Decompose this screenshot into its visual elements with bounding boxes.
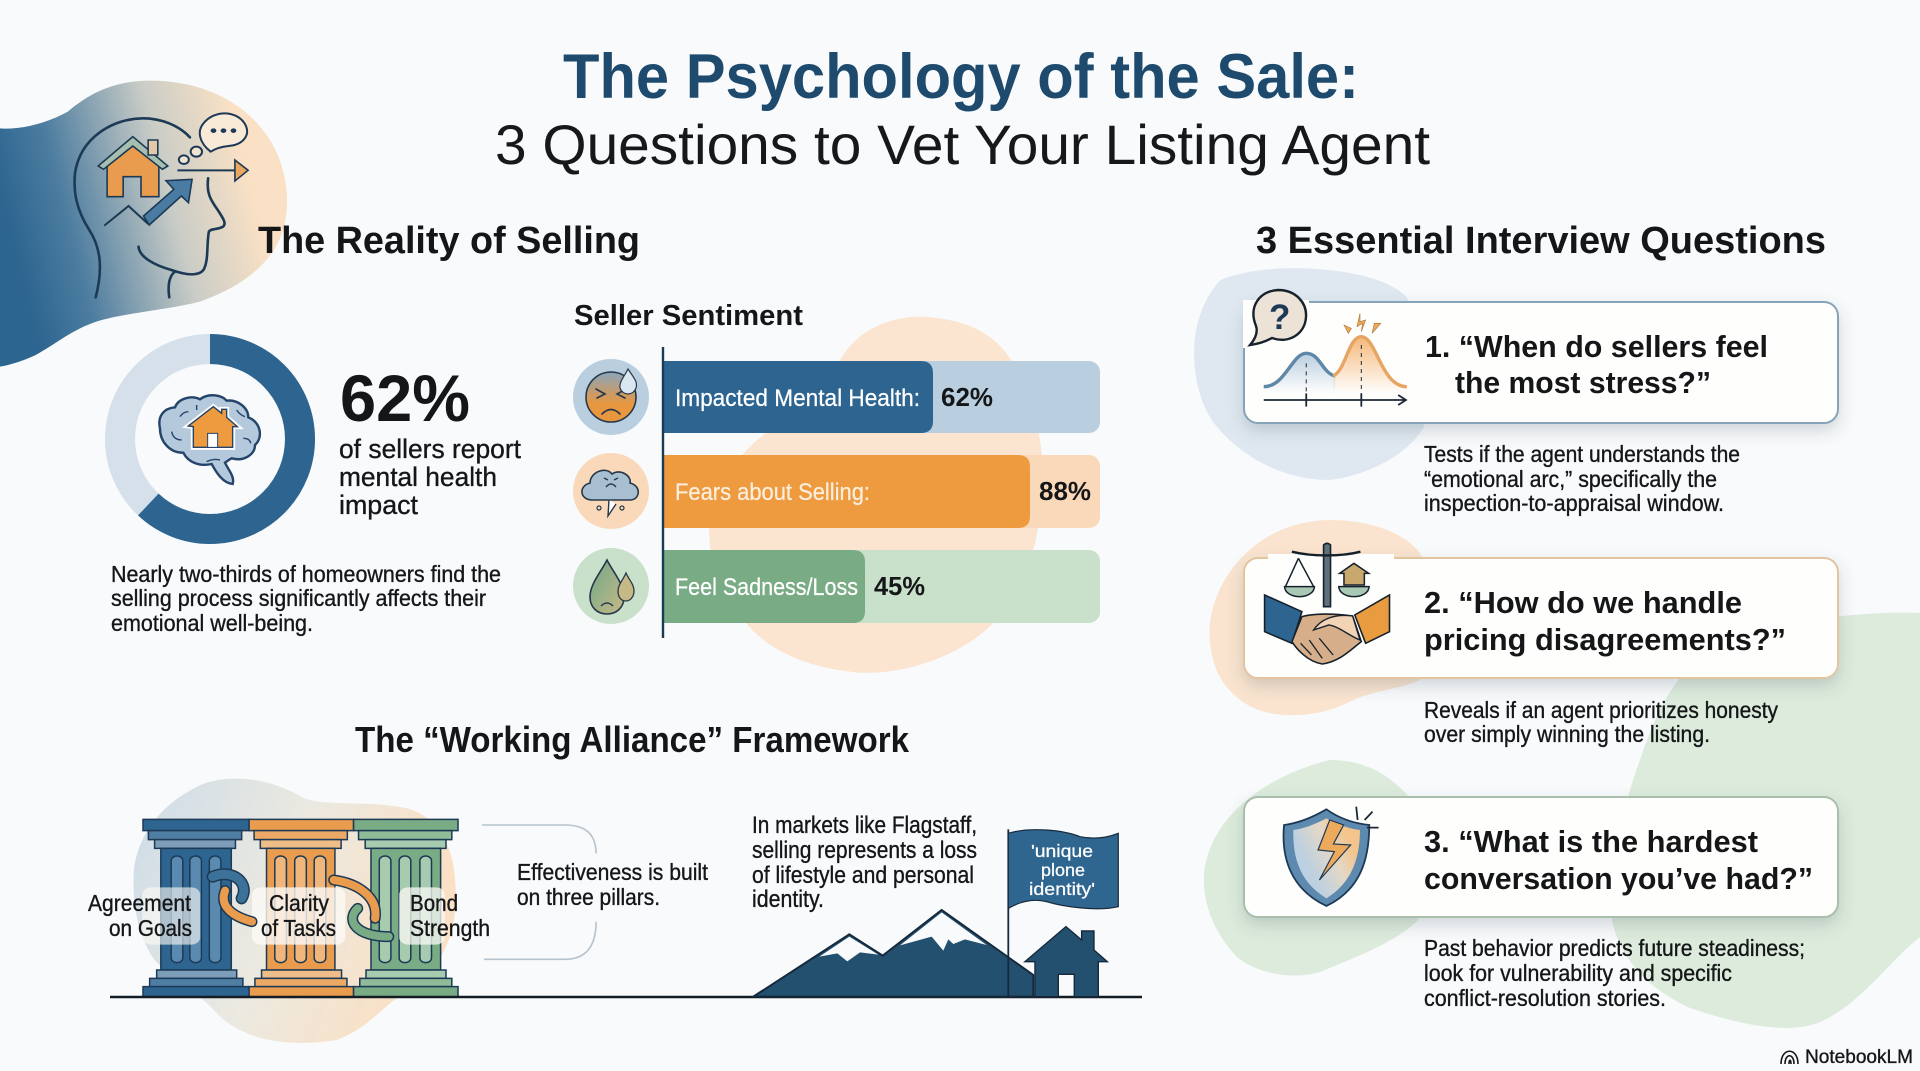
pillar labels: on Goals [109,915,192,941]
flag [1008,829,1118,997]
question card 3 [1204,760,1838,1011]
icon: question bubble: ? [1269,298,1290,337]
text: two-thirds description [111,561,501,636]
text: flagstaff note: identity. [752,886,824,913]
donut chart: 62% [120,349,300,529]
stat: 62% of sellers [339,361,521,520]
heading: interview questions: 3 Essential Interview Questions [1256,220,1826,262]
description [1424,697,1778,747]
background blob: large green right [1612,613,1920,1028]
description: “emotional arc,” specifically the [1424,466,1717,492]
icon: head with house and rising arrow on gradient blob [0,81,287,367]
flag text: identity' [1029,879,1095,899]
question text [1424,585,1786,657]
bar: impacted mental health: Impacted Mental Health: [675,385,920,412]
card [1244,558,1838,678]
label backgrounds [142,887,445,945]
pillar labels [88,890,490,941]
question text: 3. “What is the hardest [1424,824,1758,859]
question text: conversation you’ve had?” [1424,861,1813,896]
text: two-thirds description: Nearly two-thirds of homeowners find the [111,561,501,587]
description: conflict-resolution stories. [1424,985,1666,1011]
text: effectiveness note [517,859,709,910]
blob: blue [1194,268,1427,480]
blob: green [1204,760,1418,975]
bar: feel sadness/loss: Feel Sadness/Loss [675,574,858,601]
card [1244,302,1838,423]
icon: brain with house [159,395,260,484]
background blob: behind pillars [134,779,456,1043]
bracket around pillars note [482,825,596,959]
icon: question bubble [1250,290,1306,345]
icon: stressed face [573,359,649,435]
card [1244,797,1838,917]
bar: impacted mental health: 62% [941,382,993,412]
bar: feel sadness/loss [663,550,1100,623]
notebooklm watermark: NotebookLM [1805,1047,1913,1068]
bar chart: seller sentiment [663,347,1100,638]
question text: the most stress?” [1455,365,1711,400]
pillar: clarity of tasks [249,819,354,997]
pillar labels: Clarity [269,890,329,916]
stat: 62% of sellers: mental health [339,462,497,492]
title: 3 Questions to Vet Your Listing Agent [495,113,1430,176]
description: look for vulnerability and specific [1424,960,1732,986]
bar: fears about selling: Fears about Selling: [675,479,870,506]
question text [1425,329,1768,400]
text: flagstaff note: of lifestyle and personal [752,862,974,889]
blob: orange [1210,520,1422,715]
icon: emotional arc curve [1264,313,1407,407]
title [495,42,1430,176]
description [1424,935,1805,1011]
text: flagstaff note [752,812,977,913]
border knockout [1243,300,1309,348]
question card 2 [1210,520,1838,747]
question text: pricing disagreements?” [1424,622,1786,657]
heading: working alliance framework: The “Working Alliance” Framework [355,719,910,760]
pillar labels: Agreement [88,890,192,916]
pillar labels: of Tasks [261,915,336,941]
icon: storm cloud [573,453,649,529]
question text: 2. “How do we handle [1424,585,1742,620]
border knockout [1268,554,1394,564]
background blob: behind bars [709,317,1043,673]
description: Tests if the agent understands the [1424,441,1740,467]
pillar labels: Strength [410,915,490,941]
pillars: working alliance [142,819,458,997]
description [1424,441,1740,516]
stat: 62% of sellers: 62% [340,361,470,435]
heading: seller sentiment: Seller Sentiment [574,300,803,332]
pillar: bond strength [354,819,458,997]
bar: fears about selling [663,455,1100,528]
heading: the reality of selling: The Reality of Selling [258,220,640,262]
text: two-thirds description: emotional well-being. [111,610,313,636]
text: effectiveness note: Effectiveness is built [517,859,709,885]
text: effectiveness note: on three pillars. [517,884,660,910]
description: inspection-to-appraisal window. [1424,490,1724,516]
flag text: 'unique [1031,841,1093,861]
illustration: mountains, flag and house [753,829,1118,997]
question text: 1. “When do sellers feel [1425,329,1768,364]
pillar: agreement on goals [143,819,249,997]
bar: impacted mental health [663,361,1100,433]
flag text: plone [1041,860,1085,880]
links between pillars [213,874,389,937]
title: The Psychology of the Sale: [563,42,1359,112]
text: two-thirds description: selling process significantly affects their [111,585,486,611]
icon: scales and handshake [1265,543,1390,664]
bar: feel sadness/loss: 45% [874,571,925,601]
stat: 62% of sellers: of sellers report [339,434,521,464]
house [1025,927,1107,997]
pillar labels: Bond [410,890,458,916]
icon: tear drops [573,548,649,624]
description: Past behavior predicts future steadiness; [1424,935,1805,961]
question card 1 [1194,268,1838,516]
ground line [110,996,1142,998]
stat: 62% of sellers: impact [339,490,418,520]
description: over simply winning the listing. [1424,721,1710,747]
question text [1424,824,1813,896]
text: flagstaff note: In markets like Flagstaff, [752,812,977,839]
bar: fears about selling: 88% [1039,476,1091,506]
flag text [1029,841,1095,899]
icon: shield with lightning [1284,807,1379,906]
text: flagstaff note: selling represents a loss [752,837,977,864]
description: Reveals if an agent prioritizes honesty [1424,697,1778,723]
